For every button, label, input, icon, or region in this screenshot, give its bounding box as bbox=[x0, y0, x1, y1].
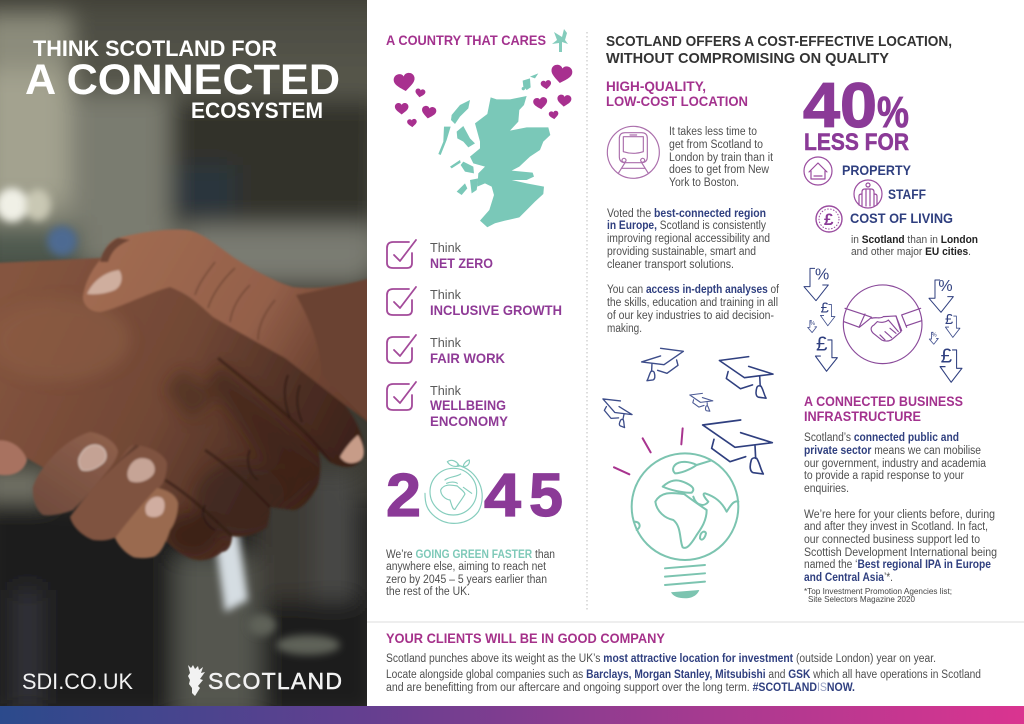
photo: clasped hands bbox=[0, 0, 367, 706]
2045 with globe bbox=[386, 460, 563, 529]
checklist: think wellbeing economy: Think bbox=[430, 383, 461, 398]
text: clients support: named the ‘Best regional IPA in Europe bbox=[804, 559, 991, 571]
title: ECOSYSTEM bbox=[191, 98, 323, 123]
checklist: think inclusive growth: INCLUSIVE GROWTH bbox=[430, 302, 562, 318]
checklist: think wellbeing economy bbox=[387, 382, 509, 429]
handshake circle bbox=[843, 285, 922, 364]
text: going green faster: the rest of the UK. bbox=[386, 586, 470, 598]
stat: 40% less for: % bbox=[877, 88, 909, 137]
illustration: handshake with falling arrows: £ bbox=[941, 345, 953, 368]
label: cost of living: COST OF LIVING bbox=[850, 210, 953, 226]
text: best-connected region bbox=[607, 208, 770, 271]
text: train time bbox=[669, 126, 774, 189]
text: clients support: We’re here for your clients before, during bbox=[804, 509, 995, 521]
text: clients support: and after they invest in Scotland. In fact, bbox=[804, 521, 988, 533]
text: in-depth analyses: You can access in-depth analyses of bbox=[607, 284, 780, 296]
panel: 40 percent less bbox=[803, 71, 997, 604]
text: clients support: Scottish Development International being bbox=[804, 547, 997, 559]
icon: house bbox=[804, 157, 832, 185]
2045 with globe: 2 bbox=[386, 461, 421, 529]
panel: high-quality low-cost location bbox=[597, 78, 780, 598]
text: best-connected region: improving regional accessibility and bbox=[607, 233, 770, 245]
footnote bbox=[804, 586, 952, 604]
panel: your clients will be in good company: YOUR CLIENTS WILL BE IN GOOD COMPANY bbox=[386, 631, 665, 646]
icon: pound coin bbox=[816, 206, 842, 232]
title: A CONNECTED bbox=[25, 56, 340, 104]
text: train time: London by train than it bbox=[669, 152, 774, 164]
text: train time: does to get from New bbox=[669, 164, 770, 176]
checklist: think inclusive growth bbox=[387, 287, 562, 318]
text: best-connected region: in Europe, Scotland is consistently bbox=[607, 220, 766, 232]
icon: pound coin: £ bbox=[824, 210, 834, 229]
main heading: cost-effective location: SCOTLAND OFFERS A COST-EFFECTIVE LOCATION, bbox=[606, 33, 952, 50]
Scotland logo: SCOTLAND bbox=[208, 668, 342, 694]
column divider bbox=[586, 32, 588, 610]
footnote: Site Selectors Magazine 2020 bbox=[808, 594, 915, 604]
2045 with globe: 5 bbox=[529, 461, 563, 529]
text: in-depth analyses bbox=[607, 284, 780, 335]
text: train time: York to Boston. bbox=[669, 177, 739, 189]
text: scotland than london: and other major EU cities. bbox=[851, 246, 971, 258]
main dark hand bbox=[0, 258, 364, 560]
checklist: think wellbeing economy: WELLBEING bbox=[430, 397, 506, 413]
text: going green faster: We’re GOING GREEN FASTER than bbox=[386, 549, 555, 561]
checklist: think net zero: NET ZERO bbox=[430, 255, 493, 271]
text: going green faster: anywhere else, aiming to reach net bbox=[386, 561, 547, 573]
stat: 40% less for: 40 bbox=[803, 71, 877, 141]
bottom gradient bar bbox=[0, 706, 1024, 724]
icon: teal thistle bbox=[552, 29, 568, 52]
text: train time: It takes less time to bbox=[669, 126, 757, 138]
text: connected public and private sector: private sector means we can mobilise bbox=[804, 445, 981, 457]
icon: staff bbox=[854, 180, 882, 208]
illustration: handshake with falling arrows: % bbox=[815, 266, 829, 283]
text: in-depth analyses: the skills, education and training in all bbox=[607, 297, 778, 309]
illustration: handshake with falling arrows: % bbox=[810, 321, 815, 327]
text: connected public and private sector: our government, industry and academia bbox=[804, 458, 987, 470]
heading: connected business infrastructure: A CONNECTED BUSINESS bbox=[804, 393, 963, 409]
checklist: think fair work: FAIR WORK bbox=[430, 350, 505, 366]
panel: your clients will be in good company: and are benefitting from our aftercare and ongoing support over the long term. #SCOTLANDISNOW. bbox=[386, 682, 855, 694]
illustration: handshake with falling arrows: £ bbox=[821, 301, 829, 317]
heading: high-quality low-cost location: HIGH-QUALITY, bbox=[606, 78, 706, 94]
panel: your clients will be in good company: Scotland punches above its weight as the UK’s most attractive location for investment (outside London) year on year. bbox=[386, 653, 936, 665]
label: staff: STAFF bbox=[888, 186, 926, 202]
text: scotland than london: in Scotland than in London bbox=[851, 234, 978, 246]
lower fingers bbox=[0, 440, 27, 475]
2045 with globe: 4 bbox=[484, 461, 521, 529]
text: connected public and private sector bbox=[804, 432, 987, 495]
checklist: think net zero bbox=[387, 240, 493, 271]
illustration: handshake with falling arrows: £ bbox=[945, 312, 953, 328]
main heading: cost-effective location: WITHOUT COMPROMISING ON QUALITY bbox=[606, 50, 889, 67]
text: clients support bbox=[804, 509, 997, 584]
text: clients support: and Central Asia’*. bbox=[804, 572, 893, 584]
text: connected public and private sector: Scotland’s connected public and bbox=[804, 432, 959, 444]
stat: 40% less for bbox=[803, 71, 909, 156]
heading: high-quality low-cost location: LOW-COST LOCATION bbox=[606, 93, 748, 109]
text: in-depth analyses: making. bbox=[607, 323, 642, 335]
title bbox=[25, 36, 340, 123]
icon: train bbox=[607, 126, 659, 178]
heading: connected business infrastructure: INFRASTRUCTURE bbox=[804, 408, 921, 424]
checklist: think fair work: Think bbox=[430, 335, 461, 350]
checklist: think inclusive growth: Think bbox=[430, 287, 461, 302]
heading: high-quality low-cost location bbox=[606, 78, 748, 109]
checklist: think wellbeing economy: ENCONOMY bbox=[430, 413, 509, 429]
thumb and palm of right hand bbox=[83, 229, 372, 425]
panel: a country that cares bbox=[386, 29, 573, 598]
text: connected public and private sector: enquiries. bbox=[804, 483, 849, 495]
text: best-connected region: Voted the best-connected region bbox=[607, 208, 766, 220]
stat: 40% less for: LESS FOR bbox=[804, 129, 909, 156]
checklist: think net zero: Think bbox=[430, 240, 461, 255]
illustration: handshake with falling arrows bbox=[804, 266, 962, 382]
heading: a country that cares: A COUNTRY THAT CARES bbox=[386, 32, 546, 48]
checklist: think fair work bbox=[387, 335, 505, 366]
panel: your clients will be in good company: Locate alongside global companies such as Barclays, Morgan Stanley, Mitsubishi and GSK which all have operations in Scotland bbox=[386, 669, 981, 681]
title: THINK SCOTLAND FOR bbox=[33, 36, 277, 61]
text: train time: get from Scotland to bbox=[669, 139, 763, 151]
text: going green faster bbox=[386, 549, 555, 598]
website address: SDI.CO.UK bbox=[22, 669, 133, 694]
falling arrows bbox=[804, 268, 828, 301]
section separator bbox=[367, 621, 1024, 623]
text: clients support: our connected business support led to bbox=[804, 534, 980, 546]
illustration: handshake with falling arrows: % bbox=[938, 278, 953, 295]
panel: your clients will be in good company bbox=[386, 631, 981, 694]
text: scotland than london bbox=[851, 234, 978, 258]
text: in-depth analyses: of our key industries to aid decision- bbox=[607, 310, 774, 322]
text: best-connected region: providing sustainable, smart and bbox=[607, 246, 756, 258]
text: going green faster: zero by 2045 – 5 years earlier than bbox=[386, 574, 547, 586]
label: property: PROPERTY bbox=[842, 162, 912, 178]
heading: connected business infrastructure bbox=[804, 393, 963, 424]
illustration: handshake with falling arrows: % bbox=[932, 333, 937, 339]
main heading: cost-effective location bbox=[606, 33, 952, 67]
illustration: light bulb globe with graduation caps bbox=[597, 348, 773, 598]
illustration: handshake with falling arrows: £ bbox=[816, 333, 828, 356]
map of Scotland with hearts bbox=[393, 64, 573, 227]
text: connected public and private sector: to provide a rapid response to your bbox=[804, 470, 964, 482]
footnote: *Top Investment Promotion Agencies list; bbox=[804, 586, 952, 596]
text: best-connected region: cleaner transport solutions. bbox=[607, 259, 734, 271]
